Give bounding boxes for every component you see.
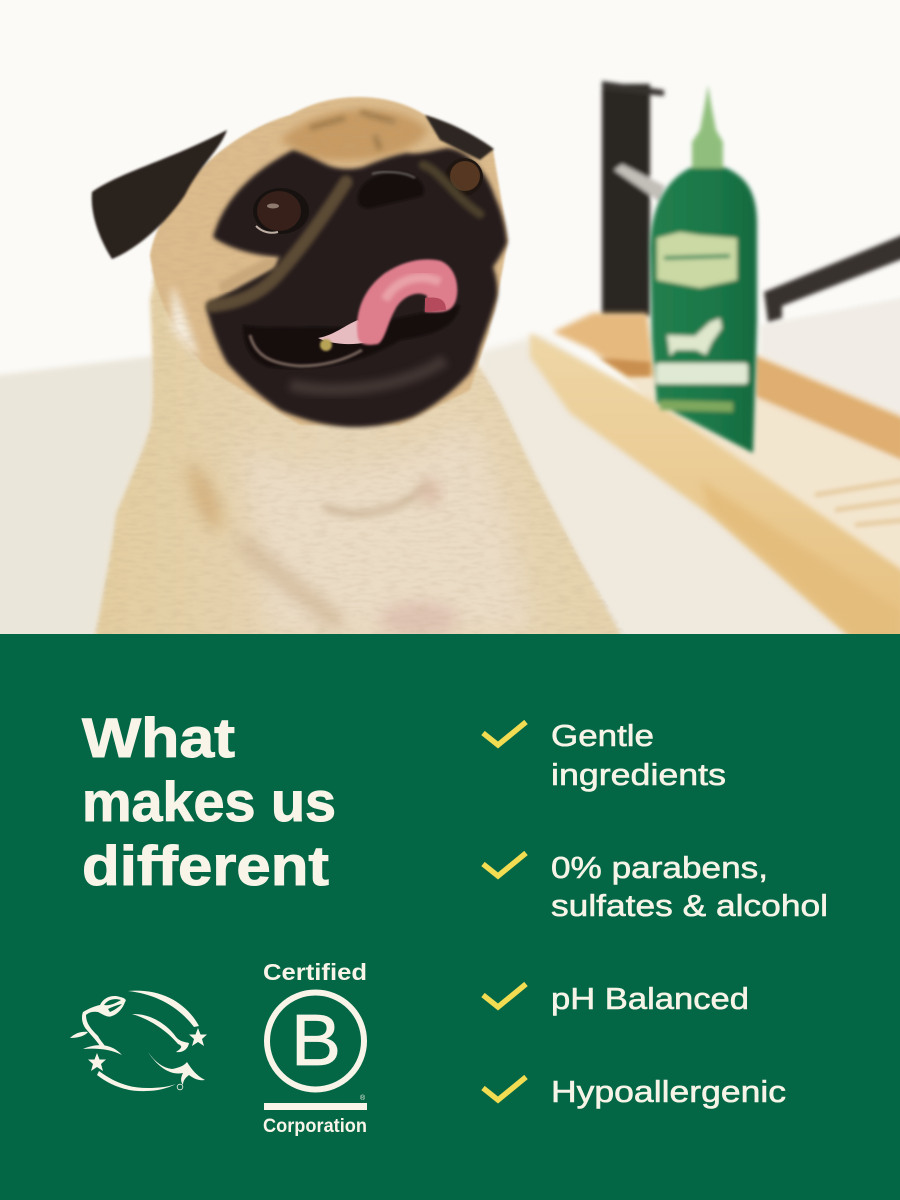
forehead [280, 109, 428, 161]
tray floor [590, 350, 900, 580]
faucet [602, 81, 900, 322]
pug [90, 90, 630, 644]
icon: check mark [483, 1077, 526, 1100]
heading: What [82, 706, 235, 769]
panel: green feature panel [0, 634, 900, 1200]
ear [92, 130, 227, 259]
far ear [425, 115, 494, 160]
chin highlight [290, 360, 445, 390]
pug head [150, 97, 508, 425]
feature: 0% parabens, sulfates and alcohol: sulfates & alcohol [551, 888, 828, 923]
heading: different [82, 834, 329, 897]
nose [358, 172, 424, 208]
feature: 0% parabens, sulfates and alcohol: 0% parabens, [551, 850, 768, 885]
wooden tray [530, 313, 900, 640]
chest fur [240, 420, 530, 634]
floor right of the pug [480, 335, 846, 634]
right eye [445, 158, 483, 196]
tray right rim [755, 355, 900, 462]
icon: Certified B Corporation logo: ® [360, 1094, 366, 1102]
tray back corner [553, 313, 655, 377]
wrinkle bands [212, 182, 346, 306]
icon: Certified B Corporation logo [263, 959, 367, 1137]
counter on the right [760, 296, 900, 420]
left eye [253, 188, 309, 234]
mouth [243, 305, 460, 369]
floor left of the pug [0, 355, 154, 634]
icon: check mark [483, 984, 526, 1007]
feature: gentle ingredients: Gentle [551, 718, 654, 753]
icon: Certified B Corporation logo: B [291, 1001, 341, 1081]
feature: pH balanced [483, 981, 749, 1016]
feature: 0% parabens, sulfates and alcohol [483, 850, 828, 923]
shampoo bottle [650, 85, 757, 453]
feature: hypoallergenic [483, 1074, 786, 1109]
pale neck patch [172, 285, 200, 360]
icon: Certified B Corporation logo: Corporation [263, 1116, 367, 1137]
feature: hypoallergenic: Hypoallergenic [551, 1074, 786, 1109]
fur texture [96, 269, 623, 633]
heading [82, 706, 336, 897]
heading: makes us [82, 770, 336, 833]
icon: Leaping Bunny logo [70, 991, 207, 1091]
tongue [357, 259, 457, 345]
black muzzle mask [207, 148, 507, 427]
feature: gentle ingredients: ingredients [551, 757, 726, 792]
icon: check mark [483, 722, 526, 745]
pug body [94, 250, 626, 644]
tray front rim [530, 333, 900, 640]
feature: pH balanced: pH Balanced [551, 981, 749, 1016]
icon: check mark [483, 853, 526, 876]
photo: pug in a bathroom with a shampoo bottle [0, 0, 900, 644]
tray slats [815, 480, 900, 525]
feature: gentle ingredients [483, 718, 726, 792]
icon: Certified B Corporation logo: Certified [263, 959, 367, 985]
